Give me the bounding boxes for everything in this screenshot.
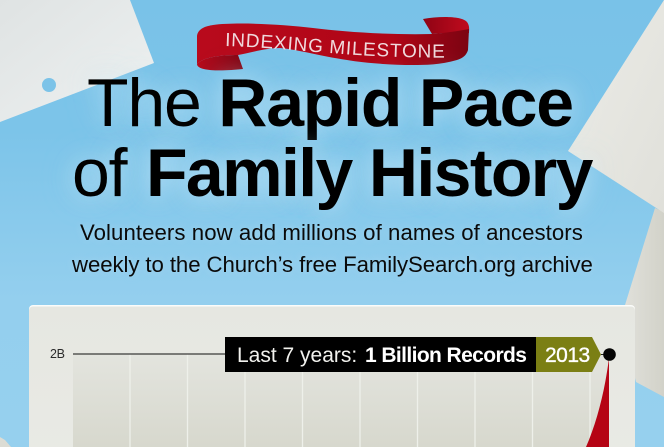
callout: last 7 years	[225, 337, 609, 372]
paper sheet: lower right	[625, 208, 664, 397]
red growth curve	[586, 358, 609, 447]
paper sheet: upper right	[568, 0, 664, 213]
ribbon banner	[197, 17, 469, 70]
title: The Rapid Pace	[87, 65, 573, 141]
title	[70, 62, 598, 214]
callout: last 7 years: 2013	[545, 344, 590, 367]
subtitle	[72, 220, 593, 277]
subtitle: weekly to the Church’s free FamilySearch.org archive	[72, 252, 593, 277]
callout: last 7 years: 1 Billion Records	[365, 344, 526, 367]
chart columns	[73, 354, 609, 447]
panel background	[29, 305, 635, 447]
subtitle: Volunteers now add millions of names of ancestors	[80, 220, 583, 245]
paper sheet: lower left corner	[0, 437, 11, 447]
title: of Family History	[72, 135, 592, 211]
axis label: 2B: 2B	[50, 347, 65, 361]
ribbon label: INDEXING MILESTONE	[226, 33, 444, 58]
callout: last 7 years: Last 7 years:	[237, 344, 357, 367]
gridline at 2B	[73, 353, 228, 355]
data point: 2013	[603, 348, 616, 361]
paper sheet: top left	[0, 0, 154, 122]
